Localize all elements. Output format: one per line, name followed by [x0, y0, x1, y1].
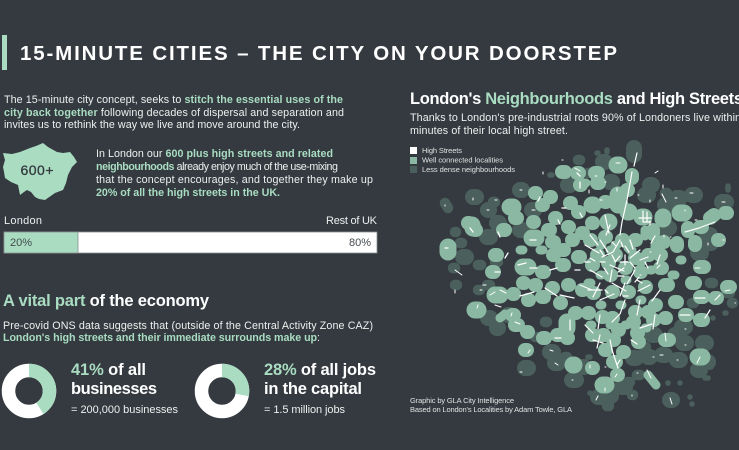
map heading: London's Neighbourhoods and High Streets	[410, 90, 739, 108]
map: London localities and high streets	[445, 148, 736, 406]
title: 15-MINUTE CITIES – THE CITY ON YOUR DOORSTEP	[20, 42, 617, 65]
donut: 41% of businesses	[8, 370, 50, 412]
intro text: invites us to rethink the way we live and move around the city.	[4, 119, 300, 131]
map subheading: minutes of their local high street.	[410, 125, 568, 137]
intro text: city back together following decades of dispersal and separation and	[4, 107, 344, 119]
economy intro text: Pre-covid ONS data suggests that (outside of the Central Activity Zone CAZ)	[3, 320, 373, 332]
London text block: In London our 600 plus high streets and related	[96, 148, 333, 160]
bar chart: London vs rest of UK: London	[4, 215, 42, 227]
economy intro text: London's high streets and their immediate surrounds make up:	[3, 332, 320, 344]
icon: London map 600+	[3, 143, 77, 200]
map legend: Well connected localities	[422, 156, 503, 164]
intro text	[4, 94, 344, 131]
stat: 41% of all businesses: 41% of all	[71, 361, 146, 379]
stat: 28% of all jobs: 28% of all jobs	[264, 361, 376, 379]
heading: a vital part of the economy: A vital part of the economy	[3, 292, 210, 310]
London text block: 20% of all the high streets in the UK.	[96, 187, 280, 199]
map legend	[410, 146, 515, 174]
donut: 28% of jobs	[202, 370, 242, 412]
bar chart: London vs rest of UK	[4, 215, 378, 253]
London text block	[96, 148, 373, 199]
credits: Based on London's Localities by Adam Towle, GLA	[410, 405, 572, 414]
map subheading: Thanks to London's pre-industrial roots 90% of Londoners live within	[410, 112, 739, 124]
credits	[410, 396, 572, 414]
title	[2, 35, 617, 70]
stat: 28% of all jobs: in the capital	[264, 380, 362, 398]
stat: 28% of all jobs	[264, 361, 376, 416]
London text block: neighbourhoods already enjoy much of the use-mixing	[96, 161, 338, 173]
icon: London map 600+: 600+	[20, 162, 54, 178]
economy intro text	[3, 320, 373, 344]
high streets	[445, 153, 736, 404]
map legend: High Streets	[422, 146, 462, 155]
London text block: that the concept encourages, and together they make up	[96, 174, 373, 186]
intro text: The 15-minute city concept, seeks to stitch the essential uses of the	[4, 94, 343, 106]
less dense neighbourhoods	[445, 148, 733, 406]
stat: 41% of all businesses: = 200,000 businesses	[71, 404, 178, 416]
bar chart: London vs rest of UK: 20%	[10, 237, 32, 249]
credits: Graphic by GLA City Intelligence	[410, 396, 514, 405]
stat: 41% of all businesses: businesses	[71, 380, 157, 398]
stat: 41% of all businesses	[71, 361, 178, 416]
map subheading	[410, 112, 739, 137]
bar chart: London vs rest of UK: Rest of UK	[326, 215, 378, 227]
bar chart: London vs rest of UK: 80%	[349, 237, 371, 249]
map legend: Less dense neighbourhoods	[422, 165, 515, 174]
stat: 28% of all jobs: = 1.5 million jobs	[264, 404, 346, 416]
well connected localities	[448, 165, 730, 385]
